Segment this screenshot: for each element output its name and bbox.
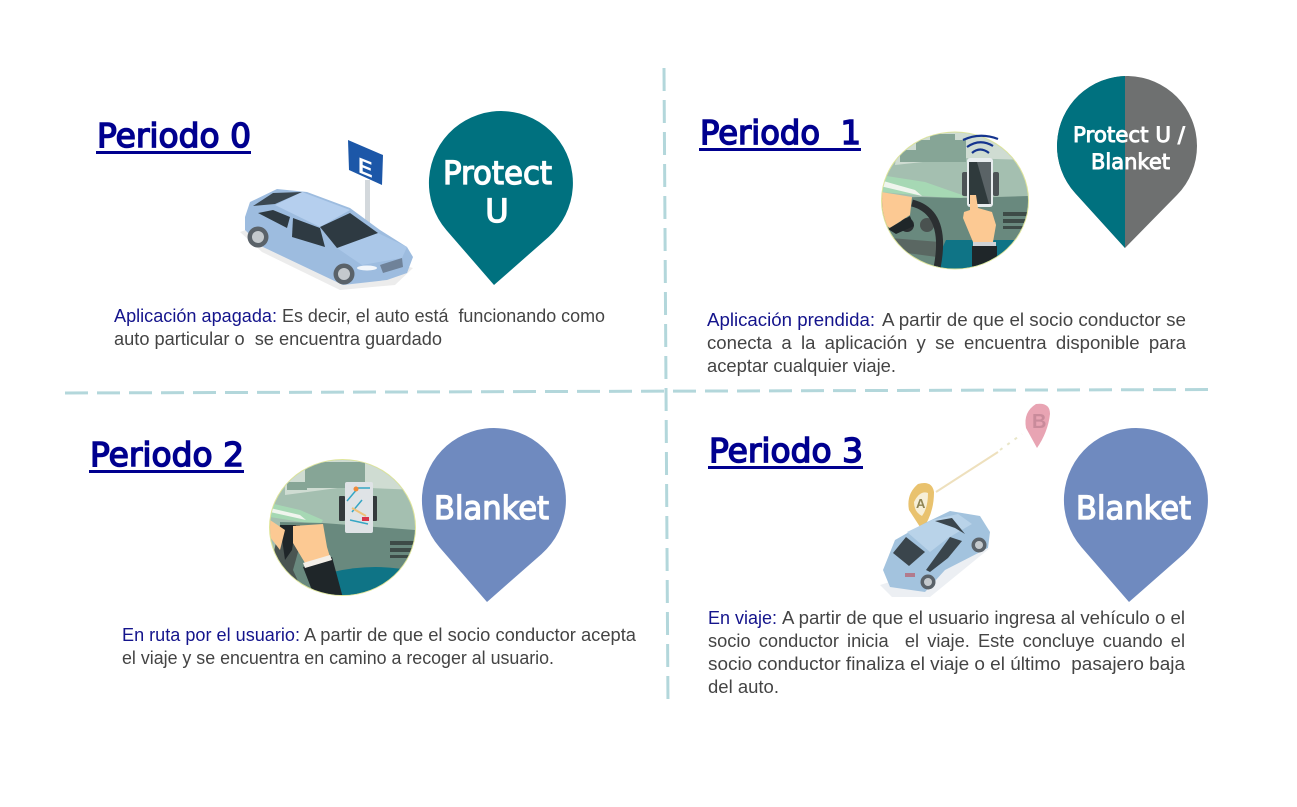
text block: aplicación prendida: Aplicación prendida: — [707, 310, 875, 330]
text block: en viaje — [708, 608, 1186, 697]
pin: Protect U: Protect — [443, 154, 552, 192]
text block: aplicación apagada: Es decir, el auto está funcionando como — [282, 306, 605, 326]
icon: parked car with parking sign: E — [358, 152, 373, 183]
text block: en viaje: A partir de que el usuario ingresa al vehículo o el — [782, 608, 1185, 628]
icon: car on route from A to B — [880, 404, 1050, 597]
pin: Protect U / Blanket: Blanket — [1091, 150, 1170, 174]
text block: aplicación prendida: aceptar cualquier viaje. — [707, 356, 896, 376]
text block: en viaje: socio conductor finaliza el viaje o el último pasajero baja — [708, 654, 1186, 674]
heading: periodo 3: Periodo 3 — [709, 431, 863, 470]
icon: hand tapping phone while driving — [880, 130, 1030, 275]
panel: periodo 1 — [699, 76, 1197, 376]
pin: Blanket: Blanket — [1076, 489, 1191, 527]
text block: en ruta por el usuario: En ruta por el usuario: — [122, 625, 300, 645]
text block: aplicación apagada: auto particular o se encuentra guardado — [114, 329, 442, 349]
pin: Protect U: U — [485, 192, 509, 230]
panel: periodo 0 — [96, 111, 605, 349]
text block: aplicación apagada — [114, 306, 605, 349]
text block: en ruta por el usuario: el viaje y se encuentra en camino a recoger al usuario. — [122, 648, 554, 668]
text block: en viaje: En viaje: — [708, 608, 777, 628]
text block: en ruta por el usuario: A partir de que el socio conductor acepta — [304, 625, 637, 645]
pin: Protect U / Blanket: Protect U / — [1073, 123, 1186, 147]
pin: Blanket: Blanket — [434, 489, 549, 527]
icon: car on route from A to B: B — [1032, 411, 1046, 433]
pin: Protect U / Blanket — [1057, 76, 1197, 248]
panel: periodo 3 — [708, 404, 1208, 697]
icon: car on route from A to B: A — [916, 496, 926, 511]
pin: Blanket — [422, 428, 566, 602]
heading: periodo 1: Periodo 1 — [700, 113, 861, 152]
heading: periodo 2: Periodo 2 — [90, 435, 244, 474]
icon: parked car with parking sign — [240, 140, 413, 290]
pin: Protect U — [429, 111, 573, 285]
heading: periodo 0: Periodo 0 — [97, 116, 251, 155]
text block: aplicación prendida — [707, 310, 1187, 376]
text block: aplicación apagada: Aplicación apagada: — [114, 306, 277, 326]
pin: Blanket — [1064, 428, 1208, 602]
text block: en viaje: socio conductor inicia el viaje. Este concluye cuando el — [708, 631, 1185, 651]
text block: en ruta por el usuario — [122, 625, 637, 668]
text block: aplicación prendida: A partir de que el socio conductor se — [882, 310, 1186, 330]
infographic canvas — [65, 68, 1208, 699]
text block: en viaje: del auto. — [708, 677, 779, 697]
panel: periodo 2 — [89, 428, 637, 668]
icon: driver following map on phone — [268, 458, 418, 598]
text block: aplicación prendida: conecta a la aplicación y se encuentra disponible para — [707, 333, 1187, 353]
